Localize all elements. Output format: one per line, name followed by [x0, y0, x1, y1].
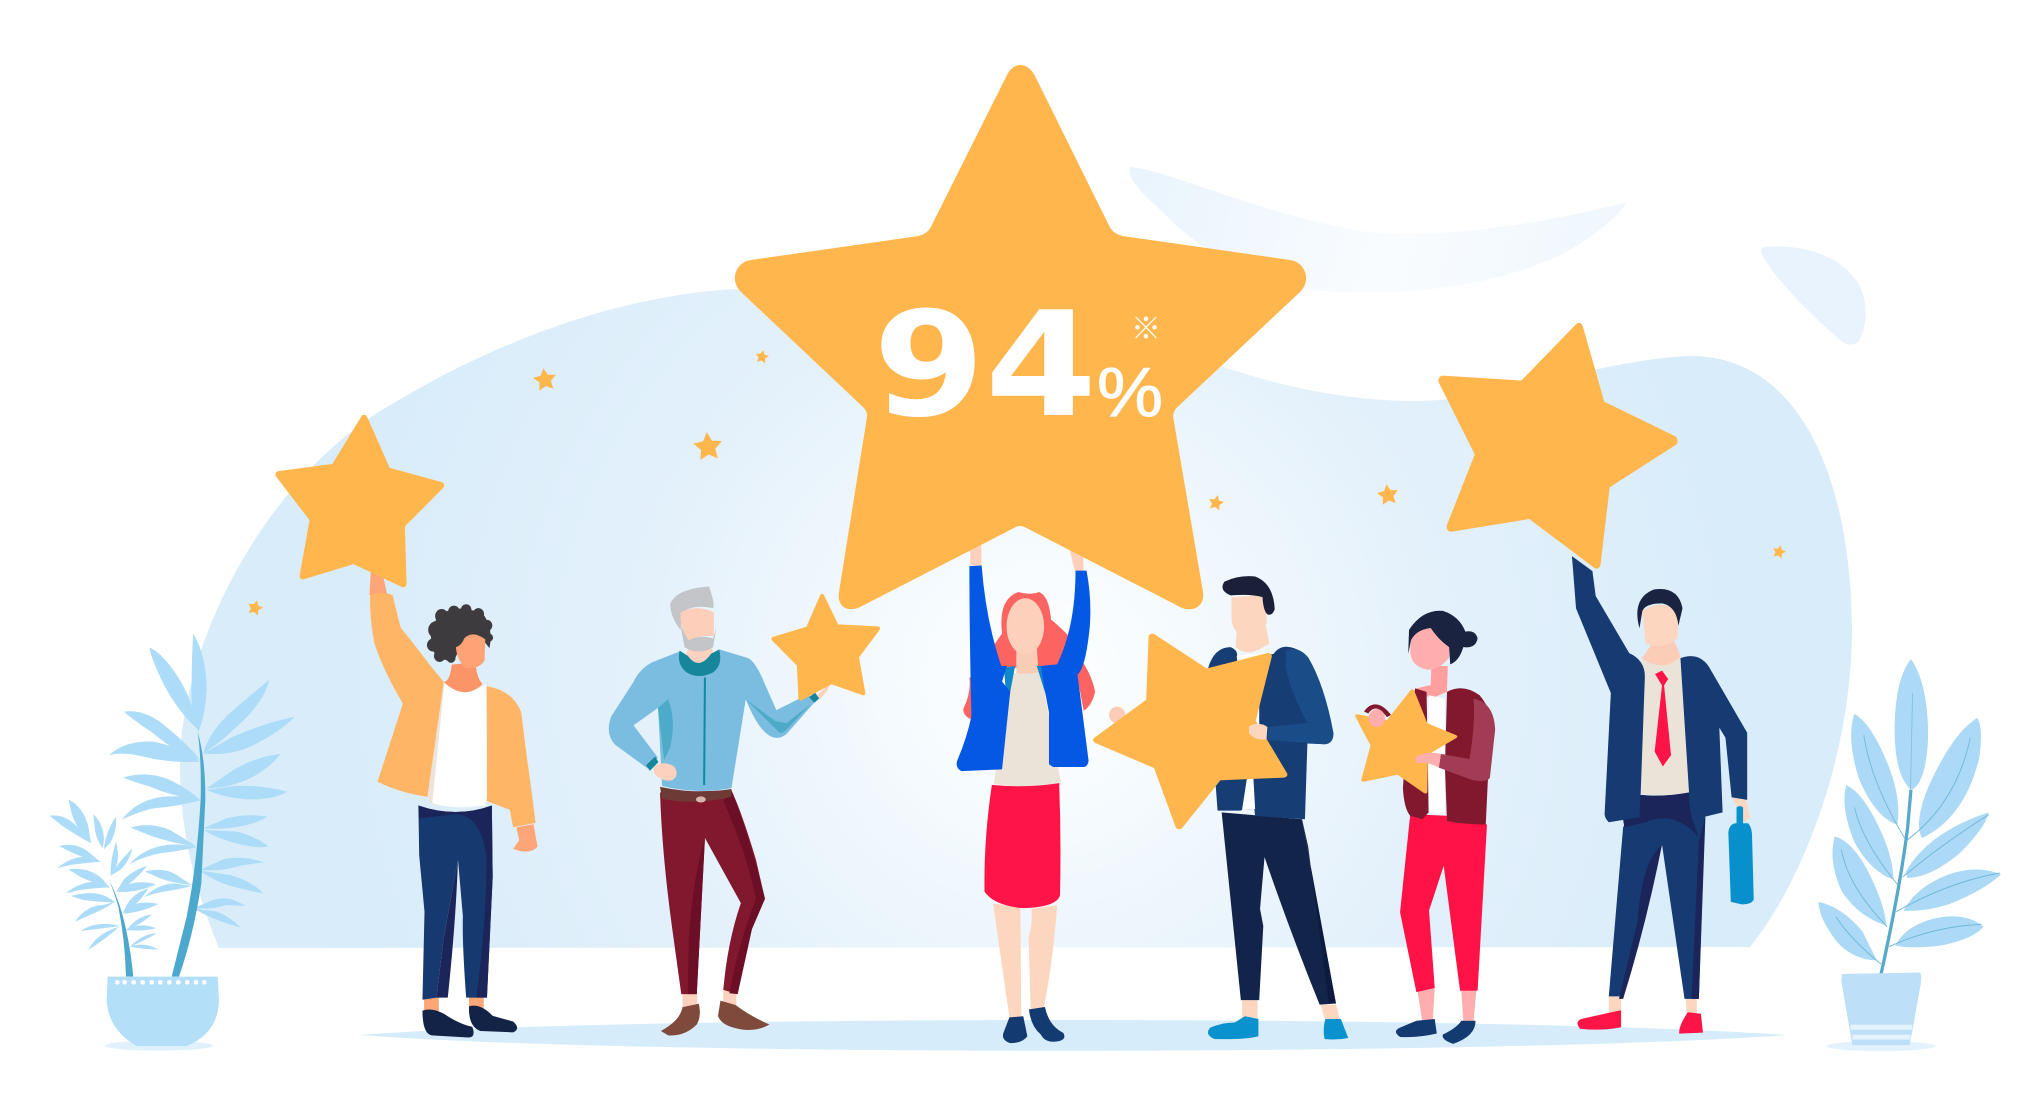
ground shadow: [360, 1020, 1787, 1051]
person 2: grey-haired man holding a star: [609, 586, 878, 1035]
person 5: woman in red trousers holding a star: [1357, 611, 1495, 1044]
person 1: curly-haired man raising a star: [279, 418, 538, 1038]
person 6: businessman raising a star and holding a briefcase: [1443, 328, 1754, 1034]
right potted plant: [1818, 659, 2001, 1051]
background swoosh: [1129, 167, 1627, 293]
background large blob: [180, 289, 1852, 948]
background small blob: [1761, 246, 1866, 345]
large gold star: [735, 65, 1306, 609]
person 4: man in navy jacket holding a big star: [1097, 576, 1348, 1040]
percent sign: %: [1097, 353, 1163, 431]
main star with 94% rating: [735, 65, 1306, 609]
rating number: 94: [873, 281, 1097, 450]
reference mark: ※: [1131, 313, 1161, 346]
left potted plants: [49, 633, 295, 1051]
scattered small stars: [246, 349, 1787, 616]
person 3: woman with red hair holding the large star: [957, 530, 1095, 1043]
